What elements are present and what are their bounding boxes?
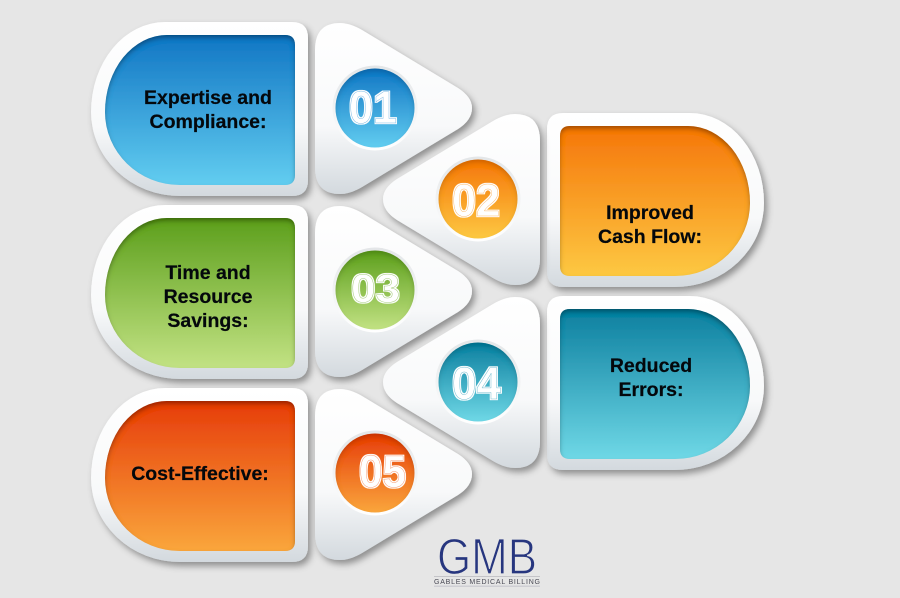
badge: 02: 02 [452,175,500,226]
badge: 01: 01 [349,82,397,133]
badge: 01 [315,23,472,194]
panel: Expertise and Compliance [91,22,308,196]
badge: 04 [383,297,540,468]
panel: Expertise and Compliance: Expertise and [144,87,272,109]
panel: Expertise and Compliance: Compliance: [149,111,267,133]
badge: 03 [315,206,472,377]
panel: Cost-Effective [91,388,308,562]
badge: 03: 03 [351,267,400,311]
panel: Time and Resource Savings: Resource [164,286,253,308]
panel: Improved Cash Flow [547,113,764,287]
panel: Time and Resource Savings [91,205,308,379]
panel: Reduced Errors: Errors: [618,379,684,401]
panel: Reduced Errors: Reduced [610,355,692,377]
panel: Improved Cash Flow: Improved [606,202,694,224]
panel: Time and Resource Savings: Time and [165,262,251,284]
badge: 02 [383,114,540,285]
badge: 05 [315,389,472,560]
badge: 04: 04 [452,358,501,409]
panel: Reduced Errors [547,296,764,470]
panel: Cost-Effective: Cost-Effective: [131,463,269,485]
panel: Time and Resource Savings: Savings: [167,310,249,332]
logo: Gables Medical Billing: GMB [437,528,537,585]
panel: Improved Cash Flow: Cash Flow: [598,226,702,248]
badge: 05: 05 [359,446,406,497]
logo: Gables Medical Billing: GABLES MEDICAL BILLING [434,579,540,586]
